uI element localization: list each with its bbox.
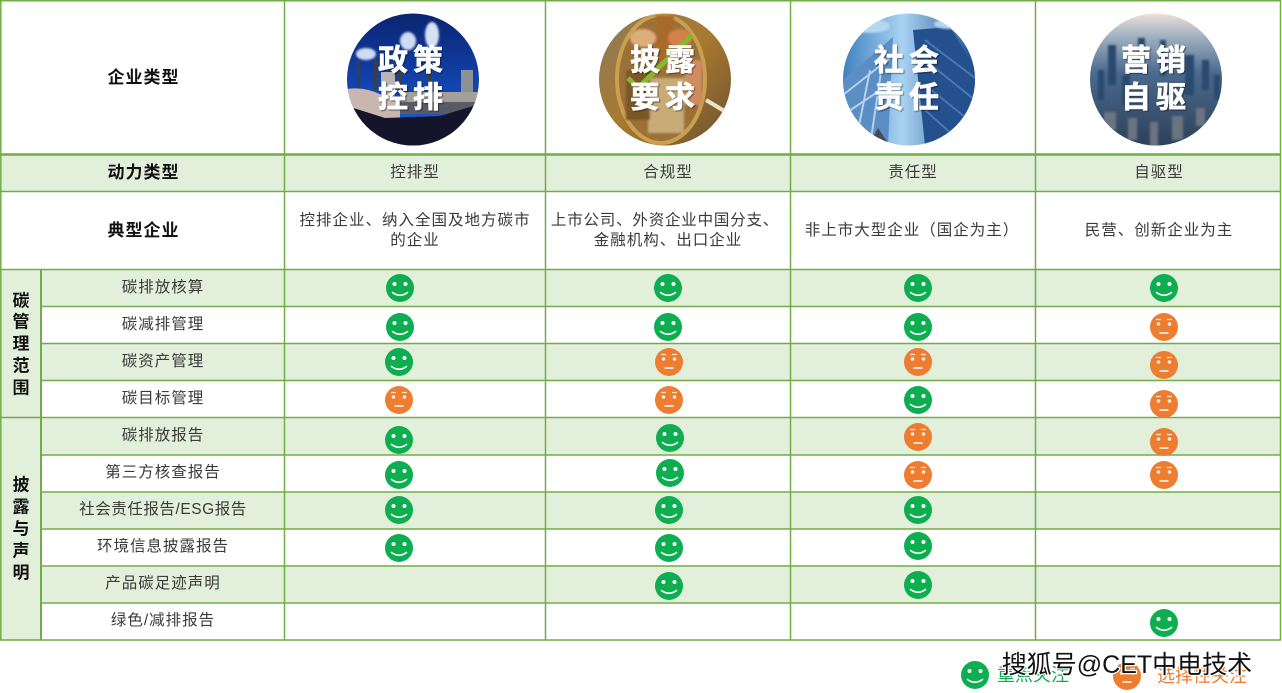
- row: 动力类型: 自驱型: [1134, 163, 1184, 181]
- legend: 重点关注: [997, 665, 1069, 685]
- heading: 企业类型: 企业类型: [108, 67, 180, 87]
- row labels: 碳减排管理: [122, 315, 204, 333]
- icon: 社会责任: [843, 13, 976, 146]
- row: 典型企业: 上市公司、外资企业中国分支、: [551, 211, 779, 229]
- icons: 碳管理范围 faces: [385, 274, 1178, 418]
- side label: 碳管理范围: 管: [12, 312, 30, 332]
- row labels: 碳资产管理: [122, 352, 204, 370]
- icon label: 营销自驱: 营销: [1121, 44, 1191, 78]
- icon label: 营销自驱: 自驱: [1121, 82, 1191, 114]
- watermark: 搜狐号@CET中电技术: [1002, 651, 1252, 679]
- row: 动力类型: 动力类型: [108, 163, 180, 182]
- icon label: 社会责任: 社会: [874, 44, 944, 78]
- row: 典型企业: 民营、创新企业为主: [1085, 221, 1233, 239]
- row: 典型企业: [108, 211, 1233, 249]
- icon: 披露要求: [599, 13, 731, 146]
- side label: 披露与声明: 明: [12, 564, 30, 582]
- icons: 披露与声明 faces: [385, 423, 1178, 637]
- row: 典型企业: 的企业: [390, 231, 440, 249]
- row: 动力类型: [108, 163, 1184, 182]
- row: 典型企业: 典型企业: [108, 220, 180, 240]
- icon label: 政策控排: [378, 44, 448, 114]
- row: 典型企业: 控排企业、纳入全国及地方碳市: [299, 211, 531, 229]
- side label: 披露与声明: 露: [12, 498, 30, 516]
- row labels: 第三方核查报告: [105, 463, 221, 481]
- side label: 披露与声明: [12, 474, 30, 582]
- icon label: 政策控排: 政策: [378, 44, 448, 78]
- side label: 披露与声明: 披: [12, 474, 30, 494]
- icon label: 披露要求: 要求: [630, 82, 700, 114]
- side label: 碳管理范围: [12, 292, 30, 398]
- icon label: 政策控排: 控排: [378, 82, 448, 114]
- row labels: 社会责任报告/ESG报告: [79, 500, 247, 518]
- icon label: 社会责任: [874, 44, 944, 114]
- icon label: 披露要求: [630, 44, 700, 114]
- side label: 碳管理范围: 碳: [12, 292, 30, 310]
- side label: 披露与声明: 声: [12, 542, 30, 560]
- row labels: 碳排放报告: [122, 426, 204, 444]
- side label: 碳管理范围: 范: [12, 356, 30, 376]
- legend: [961, 661, 1247, 690]
- side label: 披露与声明: 与: [12, 520, 30, 538]
- row: 典型企业: 金融机构、出口企业: [594, 231, 742, 249]
- table background bands: [0, 155, 1281, 640]
- legend: 选择性关注: [1157, 666, 1247, 686]
- icon label: 营销自驱: [1121, 44, 1191, 114]
- row: 动力类型: 责任型: [888, 163, 938, 181]
- row labels: 产品碳足迹声明: [105, 574, 221, 592]
- row labels: 环境信息披露报告: [97, 536, 229, 555]
- row: 动力类型: 控排型: [390, 163, 440, 181]
- icon label: 社会责任: 责任: [874, 82, 944, 114]
- row: 动力类型: 合规型: [643, 163, 693, 181]
- icon: 营销自驱: [1090, 13, 1222, 146]
- side label: 碳管理范围: 理: [12, 334, 30, 354]
- row: 典型企业: 非上市大型企业（国企为主）: [805, 221, 1019, 239]
- row labels: 绿色/减排报告: [111, 611, 215, 629]
- row labels: 碳排放核算: [122, 277, 204, 296]
- icon label: 披露要求: 披露: [630, 44, 700, 78]
- row labels: 碳目标管理: [122, 389, 204, 407]
- side label: 碳管理范围: 围: [12, 378, 30, 398]
- icon: 政策控排: [347, 13, 480, 146]
- row labels: [79, 277, 247, 629]
